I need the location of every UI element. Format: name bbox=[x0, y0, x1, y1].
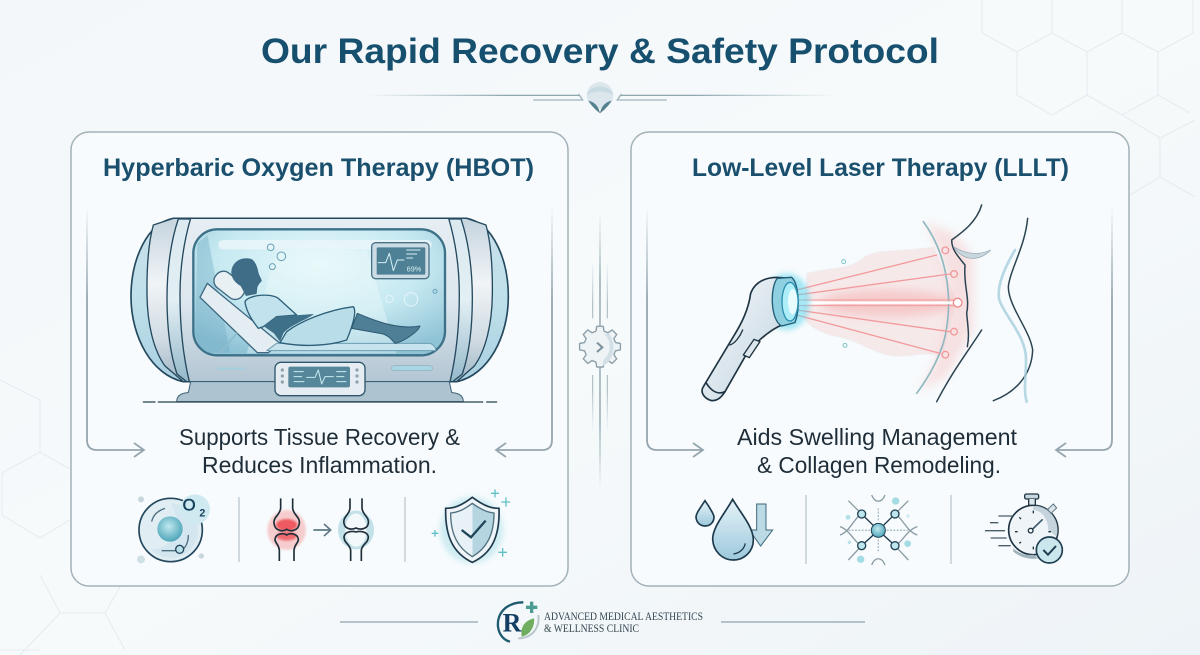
clinic name: ADVANCED MEDICAL AESTHETICS bbox=[544, 611, 703, 623]
illustration: laser handpiece and body bbox=[702, 205, 1033, 402]
icon: stopwatch with check bbox=[985, 494, 1062, 563]
divider bbox=[239, 497, 405, 562]
control console bbox=[177, 362, 463, 402]
footer rule: left bbox=[340, 621, 478, 623]
text: LLLT benefit: & Collagen Remodeling. bbox=[757, 452, 1001, 478]
clinic logo: R bbox=[503, 609, 522, 638]
panel: LLLT bbox=[631, 132, 1129, 586]
text: LLLT benefit: Aids Swelling Management bbox=[737, 424, 1018, 450]
panel: HBOT bbox=[71, 132, 568, 586]
clinic logo bbox=[498, 602, 539, 642]
heading: LLLT: Low-Level Laser Therapy (LLLT) bbox=[692, 154, 1069, 182]
flow arrow: right bbox=[1056, 205, 1112, 457]
body outline bbox=[937, 205, 1033, 402]
text: HBOT benefit: Supports Tissue Recovery & bbox=[179, 424, 460, 450]
handpiece bbox=[763, 273, 810, 330]
illustration: hyperbaric chamber bbox=[131, 218, 508, 402]
patient bbox=[231, 258, 420, 345]
monitor: 69% bbox=[407, 265, 422, 274]
icon: collagen network bbox=[840, 495, 917, 565]
footer bbox=[340, 602, 865, 642]
flow arrow: right bbox=[496, 205, 552, 457]
heading: HBOT: Hyperbaric Oxygen Therapy (HBOT) bbox=[103, 154, 534, 182]
flow arrow: left bbox=[87, 205, 144, 457]
icon: cell with oxygen: O bbox=[183, 496, 196, 515]
icon: water drops with down arrow bbox=[696, 499, 773, 560]
icon: shield with check bbox=[432, 489, 510, 563]
center connector with gear bbox=[580, 215, 620, 487]
text: HBOT benefit: Reduces Inflammation. bbox=[202, 452, 437, 478]
divider bbox=[806, 495, 951, 564]
icon: cell with oxygen bbox=[137, 494, 210, 563]
clinic name: & WELLNESS CLINIC bbox=[544, 623, 639, 635]
title: Our Rapid Recovery & Safety Protocol bbox=[261, 32, 939, 71]
title ornament bbox=[367, 82, 833, 113]
footer rule: right bbox=[721, 621, 865, 623]
reclining chair bbox=[200, 283, 280, 353]
flow arrow: left bbox=[647, 205, 703, 457]
icon: inflamed joint to healthy joint bbox=[267, 498, 374, 561]
monitor bbox=[372, 243, 429, 279]
icon: cell with oxygen: 2 bbox=[199, 508, 205, 520]
